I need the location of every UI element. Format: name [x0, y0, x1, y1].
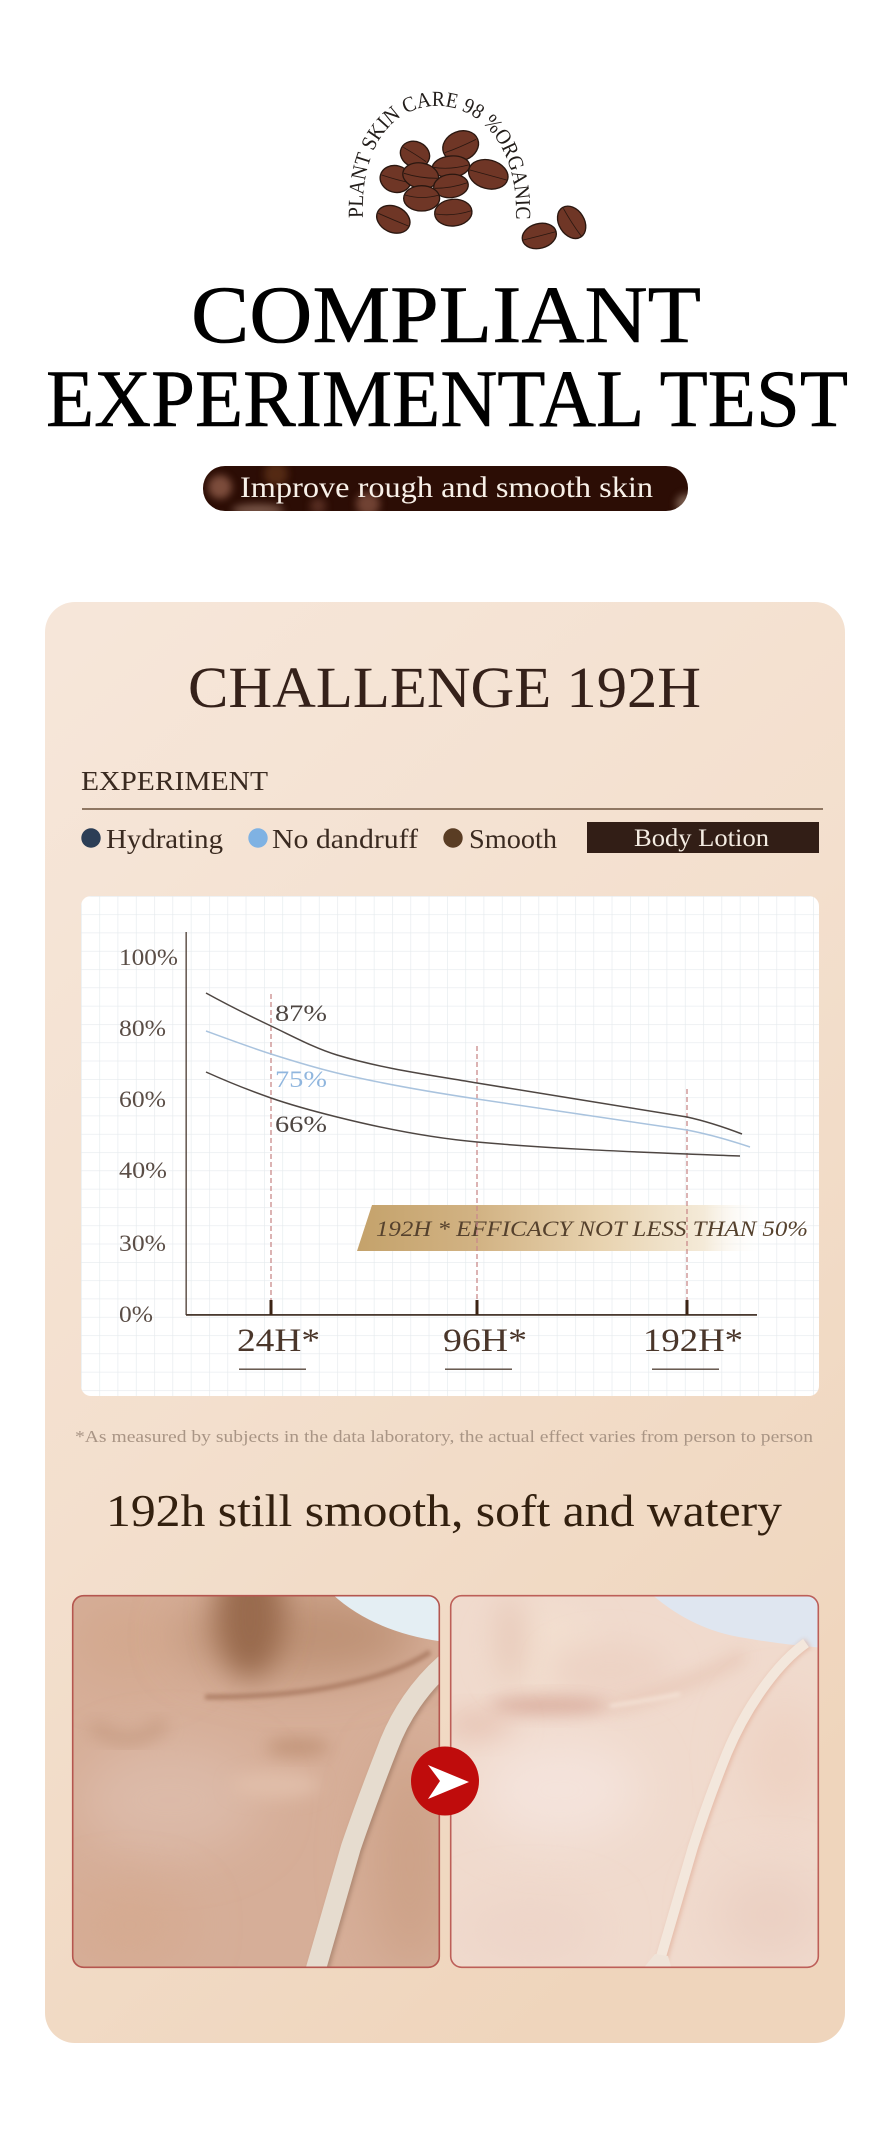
- y-axis labels: 0%: [119, 1302, 153, 1327]
- data labels: 87%: [275, 1001, 327, 1026]
- title: [46, 269, 848, 444]
- strap: [660, 1643, 806, 1960]
- heading: experiment: EXPERIMENT: [81, 766, 269, 796]
- y-axis labels: [119, 945, 178, 1327]
- banner: efficacy: [357, 1205, 808, 1251]
- panel: challenge card: [45, 602, 845, 2043]
- strap: [315, 1664, 445, 1972]
- icon: coffee beans: [372, 126, 592, 252]
- legend: [81, 824, 558, 854]
- x-axis labels: 192H*: [643, 1323, 743, 1359]
- subtitle pill: Improve rough and smooth skin: [240, 471, 653, 504]
- panel: chart: [81, 896, 819, 1396]
- y-axis labels: 100%: [119, 945, 178, 970]
- arched text: PLANT SKIN CARE 98 %ORGANIC: [348, 92, 530, 218]
- legend: No dandruff: [272, 824, 418, 854]
- curves: [206, 993, 750, 1156]
- photo: skin after: [445, 1590, 825, 1970]
- banner: efficacy: 192H * EFFICACY NOT LESS THAN 50%: [376, 1216, 808, 1241]
- data labels: 66%: [275, 1112, 327, 1137]
- dashed guide lines: [271, 994, 687, 1300]
- logo: coffee beans with arched text: [348, 92, 586, 250]
- photo: skin before: [72, 1594, 440, 1968]
- x-axis labels: 96H*: [443, 1323, 527, 1359]
- legend: Hydrating: [106, 824, 223, 854]
- axes: [186, 932, 757, 1316]
- x-axis labels: 24H*: [237, 1323, 320, 1359]
- y-axis labels: 30%: [119, 1231, 166, 1256]
- heading: challenge 192h: CHALLENGE 192H: [188, 655, 701, 720]
- background corner: [335, 1595, 440, 1641]
- data labels: [275, 1001, 327, 1137]
- subheading: 192h still smooth, soft and watery: [106, 1485, 782, 1536]
- arrow: before to after: [411, 1746, 479, 1816]
- y-axis labels: 80%: [119, 1016, 166, 1041]
- tag: body lotion: [587, 822, 819, 853]
- tag: body lotion: Body Lotion: [634, 825, 770, 852]
- y-axis labels: 40%: [119, 1158, 167, 1183]
- subtitle pill: [203, 466, 688, 511]
- legend: Smooth: [469, 824, 558, 854]
- x-axis labels: [237, 1323, 743, 1370]
- title: COMPLIANT: [191, 269, 701, 360]
- background corner: [654, 1595, 819, 1648]
- data labels: 75%: [275, 1067, 327, 1092]
- y-axis labels: 60%: [119, 1087, 166, 1112]
- title: EXPERIMENTAL TEST: [46, 353, 848, 444]
- footnote: *As measured by subjects in the data laboratory, the actual effect varies from person to person: [75, 1427, 814, 1446]
